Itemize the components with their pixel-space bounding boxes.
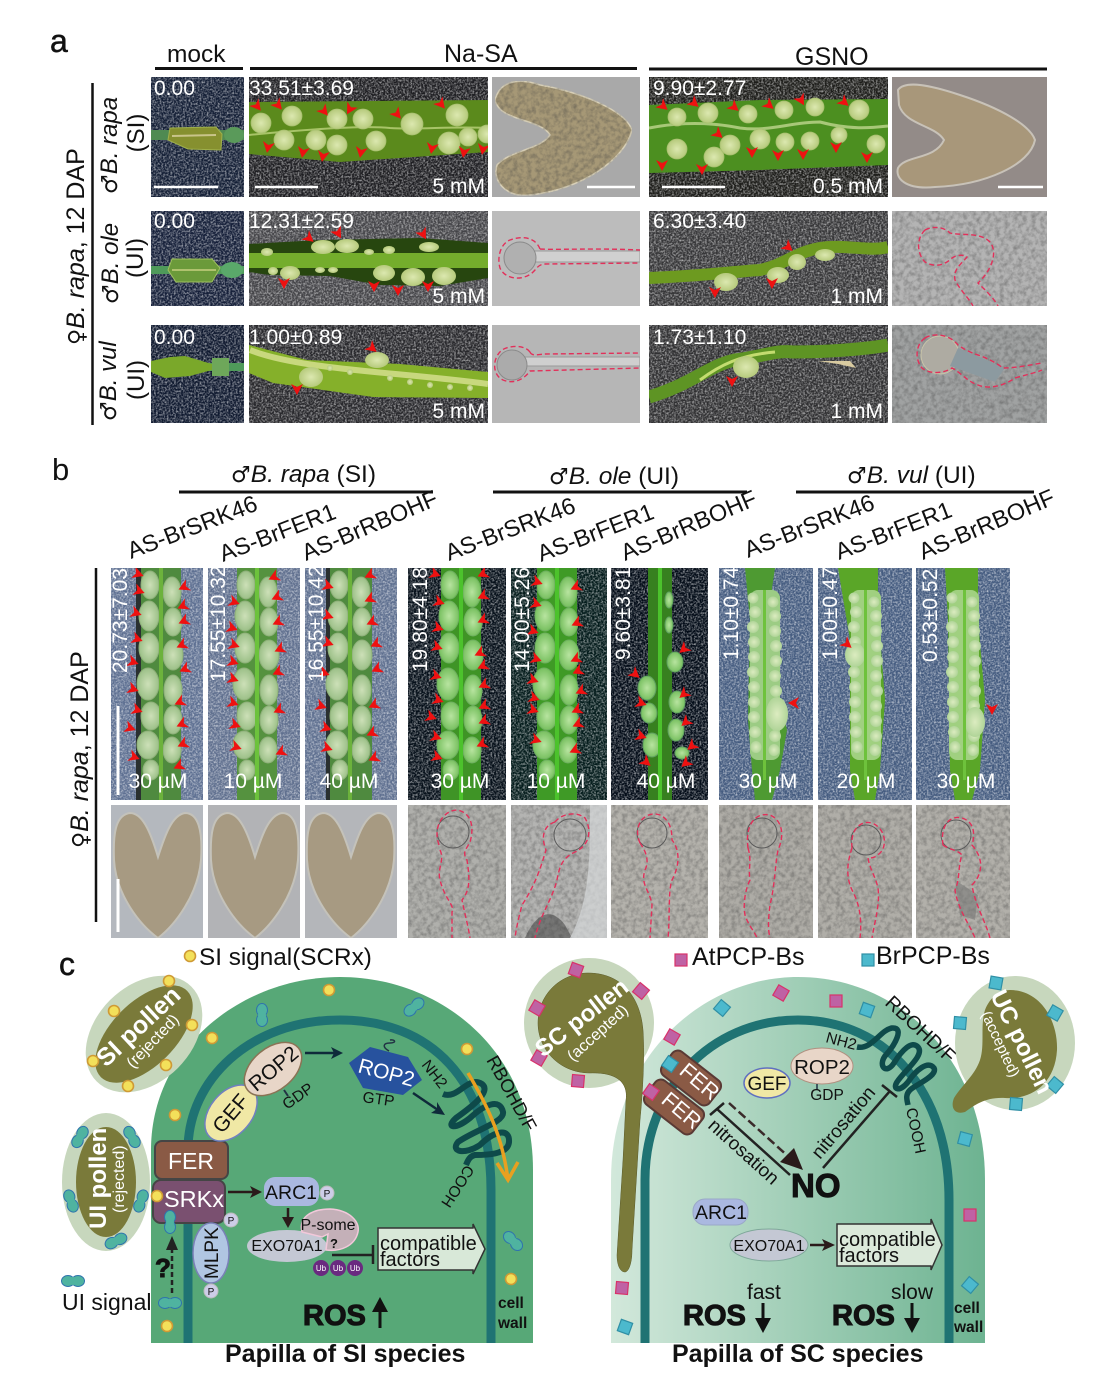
ROP2 with GDP: GDP bbox=[810, 1087, 844, 1104]
active ROP2 with GTP: ROP2 bbox=[356, 1055, 417, 1092]
ROP2 with GDP: GDP bbox=[280, 1080, 317, 1113]
SRKx to ARC1 arrow bbox=[228, 1186, 262, 1198]
ARC1: ARC1 bbox=[695, 1202, 747, 1224]
ubiquitin: Ub bbox=[316, 1264, 327, 1273]
embryo: AS-BrFER1 × B. vul bbox=[818, 805, 912, 938]
papilla of SC species bbox=[611, 977, 985, 1343]
photo: embryo GSNO row 3 with red outline bbox=[892, 325, 1047, 423]
compatible factors block arrow: factors bbox=[839, 1245, 899, 1267]
cell wall label bbox=[953, 1300, 983, 1336]
cell wall label: cell bbox=[954, 1300, 980, 1317]
ROP2 with GDP bbox=[234, 1032, 317, 1113]
photo: mock row 1 bbox=[151, 77, 244, 197]
rotated column labels: AS-BrRBOHF bbox=[617, 485, 760, 566]
photo: AS-BrFER1 × B. ole: 14.00±5.26 bbox=[511, 567, 534, 672]
panel letter b: b bbox=[52, 452, 69, 487]
rotated column labels: AS-BrRBOHF bbox=[298, 485, 441, 566]
FER receptor bbox=[155, 1141, 228, 1179]
row label: B. ole UI: (UI) bbox=[122, 238, 149, 278]
SRKx receptor bbox=[152, 1180, 225, 1234]
legend: SI signal: SI signal(SCRx) bbox=[199, 944, 372, 971]
nitrosation of FER: nitrosation bbox=[704, 1115, 783, 1189]
RBOHD/F coil with labels: COOH bbox=[437, 1162, 477, 1210]
photo: embryo GSNO row 1 bbox=[892, 77, 1047, 197]
compatible factors block arrow: compatible bbox=[380, 1233, 477, 1255]
MLPK bbox=[193, 1223, 229, 1283]
photo: AS-BrFER1 × B. ole bbox=[511, 567, 607, 800]
UC pollen: UC pollen bbox=[985, 986, 1058, 1098]
P-some: ? bbox=[330, 1236, 338, 1251]
photo: embryo GSNO row 2 with red outline bbox=[892, 211, 1047, 306]
EXO70A1 to factors arrow bbox=[810, 1239, 835, 1251]
ROS increased bbox=[303, 1297, 388, 1332]
photo: GSNO row 2 with seeds bbox=[649, 210, 888, 308]
cell wall label: wall bbox=[497, 1315, 527, 1332]
photo: AS-BrFER1 × B. vul: 20 µM bbox=[837, 770, 895, 793]
phosphate marks: P bbox=[324, 1189, 331, 1200]
photo: AS-BrRBOHF × B. vul bbox=[916, 568, 1010, 800]
row label: B. vul UI: (UI) bbox=[123, 360, 150, 400]
photo: AS-BrFER1 × B. rapa bbox=[207, 565, 300, 800]
ubiquitin bbox=[313, 1260, 363, 1276]
photo: Na-SA row 2 with seeds: 5 mM bbox=[432, 285, 485, 308]
row axis: female parent: ♀B. rapa, 12 DAP bbox=[66, 651, 94, 848]
photo: mock row 2 bbox=[151, 210, 244, 306]
photo: AS-BrSRK46 × B. rapa bbox=[109, 568, 203, 800]
phosphate marks: P bbox=[228, 1216, 235, 1227]
SI signal particles in wall bbox=[162, 984, 525, 1332]
photo: AS-BrSRK46 × B. ole: 19.80±4.18 bbox=[409, 567, 432, 672]
P-some bbox=[300, 1209, 358, 1251]
photo: mock row 3 bbox=[151, 325, 244, 423]
legend: BrPCP-Bs: BrPCP-Bs bbox=[876, 942, 990, 970]
photo: GSNO row 3 with seeds bbox=[649, 325, 888, 423]
panel b bbox=[52, 452, 1058, 938]
rotated column labels: AS-BrFER1 bbox=[831, 496, 955, 565]
photo: mock row 3: 0.00 bbox=[154, 326, 195, 349]
ROS slow: slow bbox=[891, 1281, 934, 1304]
rotated column labels: AS-BrSRK46 bbox=[740, 489, 878, 563]
embryo: AS-BrFER1 × B. rapa bbox=[208, 805, 300, 938]
cell wall label bbox=[497, 1295, 527, 1332]
ROS slow bbox=[832, 1281, 934, 1333]
photo: GSNO row 2 with seeds: 1 mM bbox=[830, 285, 883, 308]
PCP-B particles in wall bbox=[615, 985, 978, 1335]
photo: AS-BrFER1 × B. vul: 1.00±0.47 bbox=[819, 567, 842, 660]
uncertain UI signal arrow bbox=[155, 1236, 182, 1308]
cell wall label: cell bbox=[498, 1295, 524, 1312]
rotated column labels: AS-BrFER1 bbox=[215, 498, 339, 567]
ROS slow: ROS bbox=[832, 1300, 895, 1332]
heading: B. ole UI: ♂B. ole (UI) bbox=[549, 463, 679, 490]
photo: mock row 1: 0.00 bbox=[154, 77, 195, 100]
rotated column labels: AS-BrSRK46 bbox=[441, 492, 579, 566]
photo: Na-SA row 1 with seeds: 5 mM bbox=[432, 175, 485, 198]
SC pollen bbox=[524, 958, 654, 1272]
uncertain UI signal arrow: ? bbox=[155, 1253, 171, 1283]
arrow: to active ROP2 bbox=[305, 1047, 343, 1059]
rotated column labels bbox=[123, 484, 1058, 567]
photo: GSNO row 1 with seeds bbox=[649, 77, 888, 198]
embryo: AS-BrFER1 × B. ole bbox=[511, 805, 607, 938]
photo: Na-SA row 3 with seeds: 1.00±0.89 bbox=[249, 326, 342, 349]
photo: Na-SA row 3 with seeds bbox=[249, 325, 488, 423]
row label: B. vul UI: ♂B. vul bbox=[95, 341, 122, 421]
active ROP2 with GTP bbox=[349, 1040, 422, 1110]
FER receptors: FER bbox=[675, 1058, 725, 1105]
ROP2 with GDP: ROP2 bbox=[245, 1042, 303, 1096]
row axis: female parent: ♀B. rapa, 12 DAP bbox=[62, 148, 90, 345]
photo: embryo Na-SA row 1 bbox=[492, 77, 640, 197]
cell wall label: wall bbox=[953, 1319, 983, 1336]
photo: Na-SA row 1 with seeds bbox=[249, 77, 488, 198]
photo: AS-BrSRK46 × B. vul bbox=[719, 566, 813, 800]
column heading: mock bbox=[155, 41, 243, 68]
photo: AS-BrFER1 × B. vul bbox=[818, 567, 912, 800]
panel a bbox=[50, 23, 1047, 425]
heading: B. vul UI: ♂B. vul (UI) bbox=[847, 462, 976, 489]
SC pollen: SC pollen bbox=[530, 973, 634, 1063]
ARC1 to EXO70A1 arrow bbox=[282, 1208, 294, 1228]
EXO70A1: EXO70A1 bbox=[251, 1238, 323, 1255]
row label: B. rapa SI bbox=[96, 97, 150, 194]
photo: AS-BrFER1 × B. rapa: 17.55±10.32 bbox=[207, 565, 230, 682]
photo: GSNO row 2 with seeds: 6.30±3.40 bbox=[653, 210, 746, 233]
SI pollen: SI pollen bbox=[91, 981, 186, 1072]
photo: AS-BrSRK46 × B. rapa: 30 µM bbox=[129, 770, 187, 793]
heading: B. rapa SI: ♂B. rapa (SI) bbox=[231, 461, 376, 488]
ROS fast: fast bbox=[747, 1281, 781, 1304]
embryo: AS-BrSRK46 × B. ole bbox=[408, 805, 506, 938]
photo: AS-BrSRK46 × B. ole bbox=[408, 567, 506, 800]
row label: B. vul UI bbox=[95, 341, 150, 421]
column heading: Na-SA: Na-SA bbox=[444, 40, 518, 68]
papilla of SI species bbox=[151, 977, 541, 1343]
photo: AS-BrSRK46 × B. vul: 1.10±0.74 bbox=[720, 566, 743, 660]
photo: mock row 2: 0.00 bbox=[154, 210, 195, 233]
photo: AS-BrSRK46 × B. ole: 30 µM bbox=[431, 770, 489, 793]
RBOHD/F coil with labels: RBOHD/F bbox=[483, 1052, 541, 1135]
UC pollen bbox=[953, 976, 1075, 1113]
GEF bbox=[194, 1075, 268, 1151]
row label: B. ole UI bbox=[97, 223, 149, 304]
ROS fast bbox=[683, 1281, 781, 1333]
photo: Na-SA row 1 with seeds: 33.51±3.69 bbox=[249, 77, 354, 100]
SI pollen bbox=[63, 953, 225, 1115]
GEF bbox=[744, 1068, 790, 1098]
NO: NO bbox=[791, 1167, 840, 1204]
photo: AS-BrRBOHF × B. ole: 9.60±3.81 bbox=[612, 567, 635, 660]
row label: B. ole UI: ♂B. ole bbox=[97, 223, 124, 304]
compatible factors block arrow bbox=[378, 1224, 485, 1274]
FER receptor: FER bbox=[168, 1148, 214, 1174]
legend: AtPCP-Bs: AtPCP-Bs bbox=[692, 943, 805, 971]
EXO70A1 bbox=[730, 1229, 808, 1261]
ROS increased: ROS bbox=[303, 1300, 366, 1332]
FER receptors bbox=[641, 1048, 725, 1137]
photo: AS-BrFER1 × B. ole: 10 µM bbox=[527, 770, 585, 793]
UI pollen bbox=[62, 1113, 150, 1251]
photo: AS-BrRBOHF × B. rapa: 16.55±10.42 bbox=[305, 565, 328, 682]
panel letter a: a bbox=[50, 23, 68, 59]
RBOHD/F coil with labels bbox=[824, 992, 960, 1155]
rotated column labels: AS-BrFER1 bbox=[533, 498, 657, 567]
photo: AS-BrRBOHF × B. ole bbox=[611, 567, 708, 800]
row label: B. rapa SI: ♂B. rapa bbox=[96, 97, 123, 194]
photo: AS-BrRBOHF × B. vul: 0.53±0.52 bbox=[919, 569, 942, 662]
photo: embryo Na-SA row 2 with red outline bbox=[492, 211, 640, 306]
panel c bbox=[59, 942, 1075, 1368]
photo: AS-BrRBOHF × B. rapa: 40 µM bbox=[320, 770, 378, 793]
ROS fast: ROS bbox=[683, 1300, 746, 1332]
active ROP2 with GTP: GTP bbox=[361, 1089, 395, 1110]
RBOHD/F coil with labels: RBOHD/F bbox=[881, 992, 960, 1068]
P-some: P-some bbox=[300, 1217, 356, 1234]
SC pollen: (accepted) bbox=[564, 1002, 632, 1065]
EXO70A1 bbox=[247, 1230, 327, 1262]
inhibition bar bbox=[332, 1245, 373, 1264]
photo: AS-BrFER1 × B. rapa: 10 µM bbox=[224, 770, 282, 793]
GEF: GEF bbox=[208, 1090, 254, 1138]
photo: AS-BrSRK46 × B. vul: 30 µM bbox=[739, 770, 797, 793]
column heading: mock: mock bbox=[167, 41, 226, 68]
UI pollen: (rejected) bbox=[111, 1145, 128, 1213]
arrow: to RBOHD/F bbox=[413, 1093, 445, 1115]
ubiquitin: Ub bbox=[333, 1264, 344, 1273]
ROP2 with GDP bbox=[791, 1048, 853, 1104]
ubiquitin: Ub bbox=[350, 1264, 361, 1273]
photo: AS-BrRBOHF × B. rapa bbox=[305, 565, 397, 800]
photo: GSNO row 3 with seeds: 1.73±1.10 bbox=[653, 326, 746, 349]
embryo: AS-BrRBOHF × B. ole bbox=[611, 805, 708, 938]
FER receptors: FER bbox=[657, 1087, 707, 1134]
EXO70A1: EXO70A1 bbox=[733, 1238, 805, 1255]
legend: UI signal bbox=[62, 1276, 151, 1315]
RBOHD/F coil with labels: NH2 bbox=[418, 1057, 450, 1092]
photo: AS-BrRBOHF × B. ole: 40 µM bbox=[637, 770, 695, 793]
rotated column labels: AS-BrSRK46 bbox=[123, 490, 261, 564]
embryo: AS-BrRBOHF × B. vul bbox=[916, 805, 1010, 938]
compatible factors block arrow: compatible bbox=[839, 1229, 936, 1251]
SRKx receptor: SRKx bbox=[164, 1186, 224, 1212]
embryo: AS-BrSRK46 × B. rapa bbox=[111, 805, 203, 938]
embryo: AS-BrSRK46 × B. vul bbox=[719, 805, 813, 938]
photo: Na-SA row 2 with seeds bbox=[249, 210, 488, 308]
photo: AS-BrRBOHF × B. vul: 30 µM bbox=[937, 770, 995, 793]
ROP2 with GDP: ROP2 bbox=[794, 1056, 850, 1079]
GEF: GEF bbox=[747, 1074, 787, 1095]
photo: Na-SA row 3 with seeds: 5 mM bbox=[432, 400, 485, 423]
ARC1: ARC1 bbox=[265, 1182, 317, 1204]
phosphate marks bbox=[204, 1186, 334, 1298]
compatible factors block arrow bbox=[837, 1219, 942, 1270]
compatible factors block arrow: factors bbox=[380, 1249, 440, 1271]
legend: UI signal: UI signal bbox=[62, 1289, 151, 1315]
UI pollen: UI pollen bbox=[85, 1128, 112, 1229]
panel letter c: c bbox=[59, 946, 75, 982]
SI pollen: (rejected) bbox=[124, 1011, 183, 1072]
photo: GSNO row 1 with seeds: 0.5 mM bbox=[813, 175, 883, 198]
phosphate marks: P bbox=[208, 1287, 215, 1298]
photo: Na-SA row 2 with seeds: 12.31±2.59 bbox=[249, 210, 354, 233]
photo: embryo Na-SA row 3 with red outline bbox=[492, 325, 640, 423]
RBOHD/F coil with labels bbox=[418, 1052, 541, 1210]
caption: SC papilla: Papilla of SC species bbox=[672, 1340, 924, 1368]
rotated column labels: AS-BrRBOHF bbox=[915, 484, 1058, 565]
orange ROS arrow bbox=[468, 1073, 518, 1180]
photo: AS-BrSRK46 × B. rapa: 20.73±7.03 bbox=[109, 568, 132, 673]
UC pollen: (accepted) bbox=[977, 1009, 1023, 1080]
embryo: AS-BrRBOHF × B. rapa bbox=[305, 805, 397, 938]
RBOHD/F coil with labels: NH2 bbox=[824, 1029, 858, 1054]
dashed arrow to NO bbox=[729, 1103, 803, 1170]
RBOHD/F coil with labels: COOH bbox=[902, 1106, 928, 1155]
nitrosation of RBOHD/F: nitrosation bbox=[808, 1083, 880, 1163]
photo: GSNO row 1 with seeds: 9.90±2.77 bbox=[653, 77, 746, 100]
row label: B. rapa SI: (SI) bbox=[123, 114, 150, 152]
column heading: GSNO: GSNO bbox=[795, 43, 869, 71]
MLPK: MLPK bbox=[202, 1227, 223, 1279]
photo: GSNO row 3 with seeds: 1 mM bbox=[830, 400, 883, 423]
caption: SI papilla: Papilla of SI species bbox=[225, 1340, 465, 1368]
